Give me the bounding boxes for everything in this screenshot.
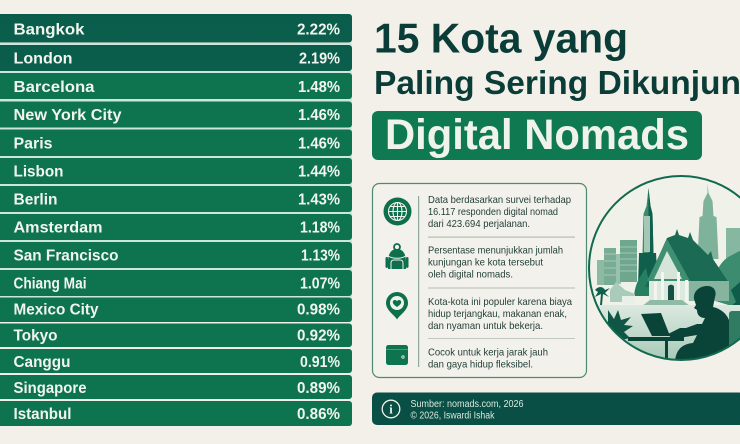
chair — [729, 311, 740, 346]
row: Amsterdam: Amsterdam — [14, 220, 102, 236]
text: percentage note: oleh digital nomads. — [428, 270, 513, 280]
row: Berlin: 1.43% — [298, 192, 340, 208]
text: popularity note — [428, 297, 572, 332]
panel: info notes — [372, 184, 586, 378]
icon: globe — [384, 198, 412, 226]
title: 15 Kota yang — [374, 14, 628, 62]
left buildings — [597, 260, 604, 285]
tall tower — [642, 188, 654, 254]
text: percentage note: Persentase menunjukkan jumlah — [428, 246, 563, 256]
row: Amsterdam: 1.18% — [300, 220, 340, 236]
row: Bangkok — [0, 14, 352, 42]
title: Paling Sering Dikunjun — [374, 64, 740, 101]
row: Mexico City: 0.98% — [297, 302, 340, 318]
row: Singapore: 0.89% — [297, 380, 340, 397]
icon: wallet — [386, 345, 408, 365]
text: popularity note: hidup terjangkau, makanan enak, — [428, 309, 567, 320]
text: survey note: dari 423.694 perjalanan. — [428, 219, 530, 230]
row: Istanbul: 0.86% — [297, 406, 340, 423]
laptop — [641, 313, 670, 336]
row: Barcelona — [0, 73, 352, 99]
row: San Francisco — [0, 242, 352, 268]
row: Singapore — [0, 375, 352, 399]
small house and palm — [610, 282, 635, 302]
row: Bangkok: Bangkok — [14, 22, 85, 38]
temple — [645, 229, 729, 289]
row: London: 2.19% — [299, 50, 340, 68]
row: Lisbon: Lisbon — [14, 164, 64, 180]
row: Tokyo: 0.92% — [297, 328, 340, 344]
row: Mexico City — [0, 298, 352, 322]
row: Paris: 1.46% — [298, 136, 340, 152]
ground — [598, 305, 740, 359]
icon: info — [382, 400, 400, 418]
text: survey note: Data berdasarkan survei terhadap — [428, 195, 571, 206]
row: Canggu: 0.91% — [300, 354, 340, 371]
row: Mexico City: Mexico City — [14, 302, 99, 318]
text: remote work note — [428, 348, 548, 370]
title highlight: Digital Nomads: Digital Nomads — [385, 111, 689, 159]
row: Tokyo — [0, 324, 352, 347]
row: Tokyo: Tokyo — [14, 328, 58, 344]
table — [628, 337, 684, 341]
row: New York City: 1.46% — [298, 107, 340, 124]
row: Singapore: Singapore — [14, 380, 87, 397]
ranking table — [0, 14, 352, 426]
row: Barcelona: Barcelona — [14, 79, 95, 96]
icon: backpack — [386, 244, 408, 269]
text: percentage note — [428, 246, 563, 280]
row: San Francisco: San Francisco — [14, 248, 118, 264]
source text — [410, 399, 524, 422]
illustration: city and digital nomad — [589, 176, 740, 365]
text: percentage note: kunjungan ke kota tersebut — [428, 258, 543, 268]
row: Canggu: Canggu — [14, 354, 70, 371]
text: popularity note: Kota-kota ini populer karena biaya — [428, 297, 572, 308]
text: survey note — [428, 195, 571, 230]
row: Lisbon — [0, 158, 352, 184]
text: survey note: 16.117 responden digital nomad — [428, 207, 558, 218]
plant — [608, 310, 633, 340]
row: London — [0, 45, 352, 71]
row: Istanbul: Istanbul — [14, 406, 72, 423]
right skyscraper — [698, 183, 718, 259]
text: remote work note: dan gaya hidup fleksibel. — [428, 360, 533, 370]
row: Berlin — [0, 186, 352, 212]
row: Barcelona: 1.48% — [298, 79, 340, 96]
title — [374, 14, 740, 101]
trees right — [716, 251, 740, 305]
row: Berlin: Berlin — [14, 192, 58, 208]
source bar — [372, 392, 740, 425]
row: Chiang Mai — [0, 270, 352, 296]
icon: location heart — [386, 292, 408, 320]
row: Paris: Paris — [14, 136, 52, 152]
row: New York City: New York City — [14, 107, 122, 124]
trees behind temple — [634, 268, 649, 296]
text: remote work note: Cocok untuk kerja jarak jauh — [428, 348, 548, 358]
row: Canggu — [0, 349, 352, 373]
source text: Sumber: nomads.com, 2026 — [410, 399, 524, 410]
row: Lisbon: 1.44% — [298, 164, 340, 180]
row: Istanbul — [0, 401, 352, 426]
row: London: London — [14, 50, 72, 68]
person — [669, 286, 729, 359]
row: New York City — [0, 102, 352, 128]
row: Paris — [0, 130, 352, 156]
text: popularity note: dan nyaman untuk bekerja. — [428, 321, 543, 332]
row: Bangkok: 2.22% — [297, 22, 340, 38]
icon: info: i — [389, 402, 393, 416]
row: Chiang Mai: Chiang Mai — [14, 276, 86, 292]
row: Amsterdam — [0, 214, 352, 240]
source text: © 2026, Iswardi Ishak — [410, 410, 495, 422]
row: San Francisco: 1.13% — [301, 248, 340, 264]
row: Chiang Mai: 1.07% — [300, 276, 340, 292]
